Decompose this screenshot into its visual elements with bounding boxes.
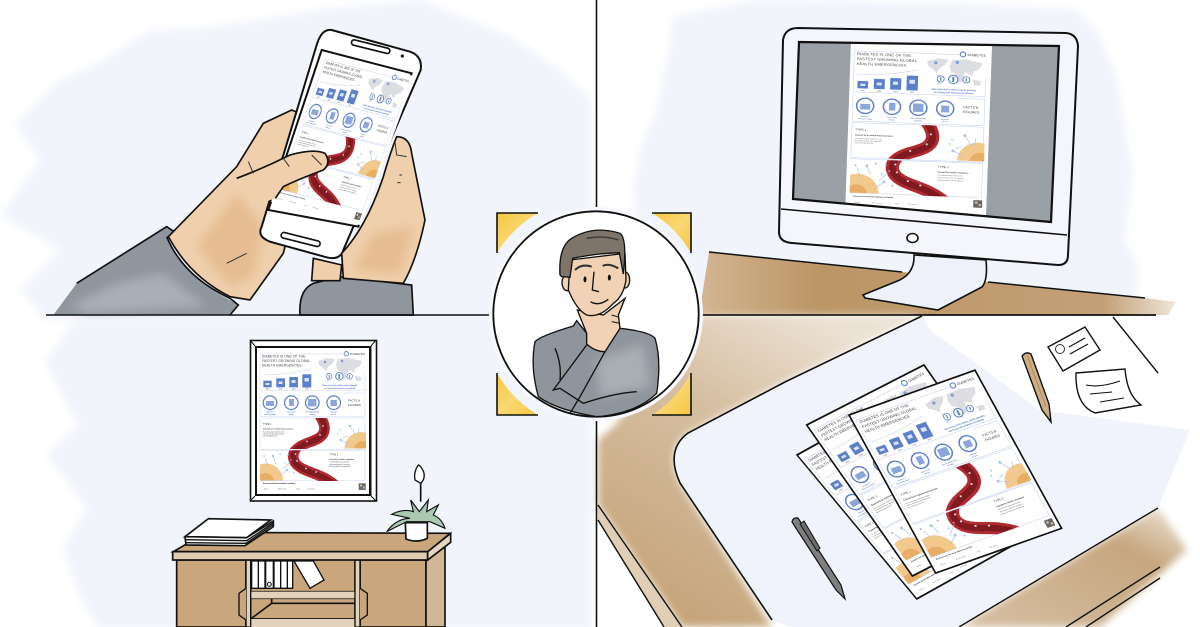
right sleeve bbox=[300, 277, 413, 315]
center badge: thinking person bbox=[489, 207, 703, 421]
pencil bbox=[1022, 353, 1051, 422]
sticky note bbox=[1076, 369, 1141, 413]
panel: phone scene bbox=[53, 30, 421, 315]
left thumb bbox=[237, 151, 328, 207]
left sleeve bbox=[53, 227, 238, 315]
business card bbox=[1048, 327, 1100, 371]
monitor body bbox=[779, 28, 1078, 265]
monitor stand bbox=[863, 255, 986, 310]
left palm bbox=[168, 110, 317, 300]
table wood bbox=[598, 315, 1187, 627]
infographic on monitor bbox=[835, 44, 1002, 217]
yellow corner: top left bbox=[497, 213, 538, 253]
desk under monitor bbox=[699, 252, 1176, 315]
stack of books bbox=[185, 519, 273, 546]
middle sheet bbox=[798, 360, 1041, 584]
yellow corner: top right bbox=[652, 213, 691, 253]
smartphone bbox=[260, 30, 421, 281]
potted plant bbox=[387, 465, 445, 541]
panel: printed sheets on a table bbox=[598, 315, 1190, 627]
infographic on phone screen bbox=[263, 51, 421, 231]
binders on shelf bbox=[252, 561, 324, 588]
yellow corner: bottom right bbox=[652, 373, 691, 415]
front sheet bbox=[840, 367, 1073, 580]
panel: poster on wall with desk bbox=[173, 340, 451, 627]
yellow corner: bottom left bbox=[497, 373, 538, 415]
panel: monitor scene bbox=[699, 28, 1176, 315]
person bbox=[533, 230, 659, 417]
pen bbox=[792, 518, 845, 599]
table pad bbox=[598, 316, 1190, 627]
framed poster bbox=[249, 340, 378, 501]
desk bbox=[173, 532, 451, 627]
right hand bbox=[342, 137, 425, 283]
back sheet bbox=[789, 391, 1034, 607]
